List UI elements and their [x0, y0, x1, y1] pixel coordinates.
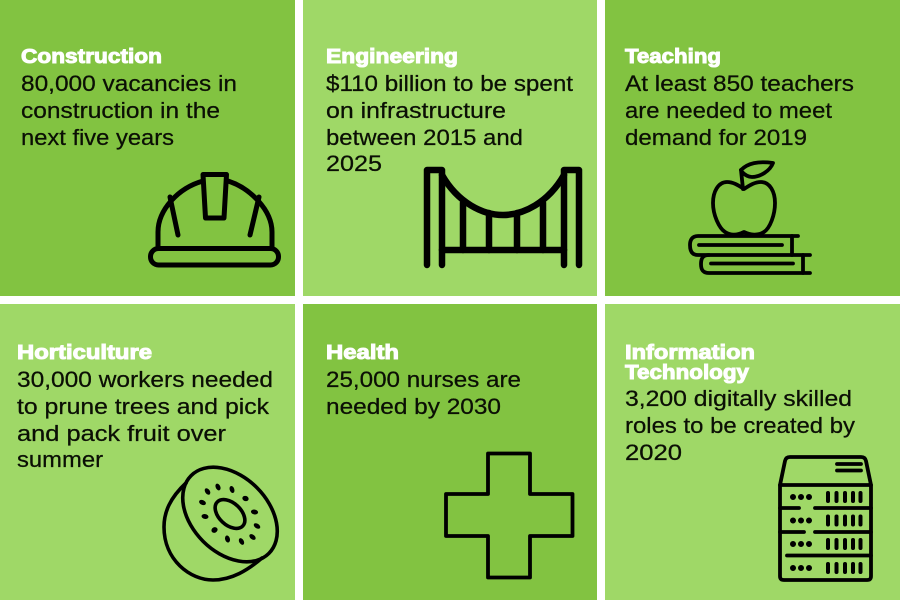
text: teachers needed: are needed to meet — [625, 98, 832, 123]
text: infrastructure spending — [326, 71, 573, 176]
heading: horticulture: Horticulture — [17, 341, 152, 364]
icon: medical cross — [446, 454, 572, 578]
text: nurses needed: needed by 2030 — [326, 394, 501, 419]
icon: kiwi fruit — [164, 449, 296, 580]
text: seasonal workers: and pack fruit over — [17, 421, 226, 446]
text: teachers needed — [625, 71, 854, 150]
panel: information technology — [605, 304, 900, 600]
icon: suspension bridge — [427, 170, 579, 265]
text: seasonal workers: summer — [17, 447, 103, 472]
panel: health — [303, 304, 597, 600]
text: nurses needed — [326, 367, 521, 419]
icon: server rack — [780, 457, 871, 580]
text: seasonal workers — [17, 367, 273, 472]
text: construction vacancies — [21, 71, 237, 150]
heading: health: Health — [326, 341, 399, 364]
heading: teaching: Teaching — [625, 45, 721, 68]
panel: teaching — [605, 0, 900, 296]
text: seasonal workers: to prune trees and pick — [17, 394, 270, 419]
text: infrastructure spending: on infrastructure — [326, 98, 506, 123]
text: infrastructure spending: between 2015 and — [326, 125, 523, 150]
text: digital roles: 2020 — [625, 440, 682, 465]
text: digital roles: roles to be created by — [625, 413, 855, 438]
heading: information technology — [625, 341, 755, 384]
text: nurses needed: 25,000 nurses are — [326, 367, 521, 392]
heading: engineering: Engineering — [326, 45, 458, 68]
text: teachers needed: At least 850 teachers — [625, 71, 854, 96]
text: construction vacancies: next five years — [21, 125, 174, 150]
text: seasonal workers: 30,000 workers needed — [17, 367, 273, 392]
panel: engineering — [303, 0, 597, 296]
icon: hard hat — [150, 174, 278, 265]
panel: horticulture — [0, 304, 296, 600]
icon: apple on books — [690, 162, 810, 273]
text: digital roles — [625, 386, 855, 465]
text: infrastructure spending: $110 billion to be spent — [326, 71, 573, 96]
text: infrastructure spending: 2025 — [326, 151, 382, 176]
heading: information technology: Technology — [625, 361, 750, 384]
heading: information technology: Information — [625, 341, 755, 364]
text: construction vacancies: construction in the — [21, 98, 220, 123]
heading: construction: Construction — [21, 45, 162, 68]
text: digital roles: 3,200 digitally skilled — [625, 386, 852, 411]
panel: construction — [0, 0, 295, 296]
text: teachers needed: demand for 2019 — [625, 125, 807, 150]
text: construction vacancies: 80,000 vacancies in — [21, 71, 237, 96]
